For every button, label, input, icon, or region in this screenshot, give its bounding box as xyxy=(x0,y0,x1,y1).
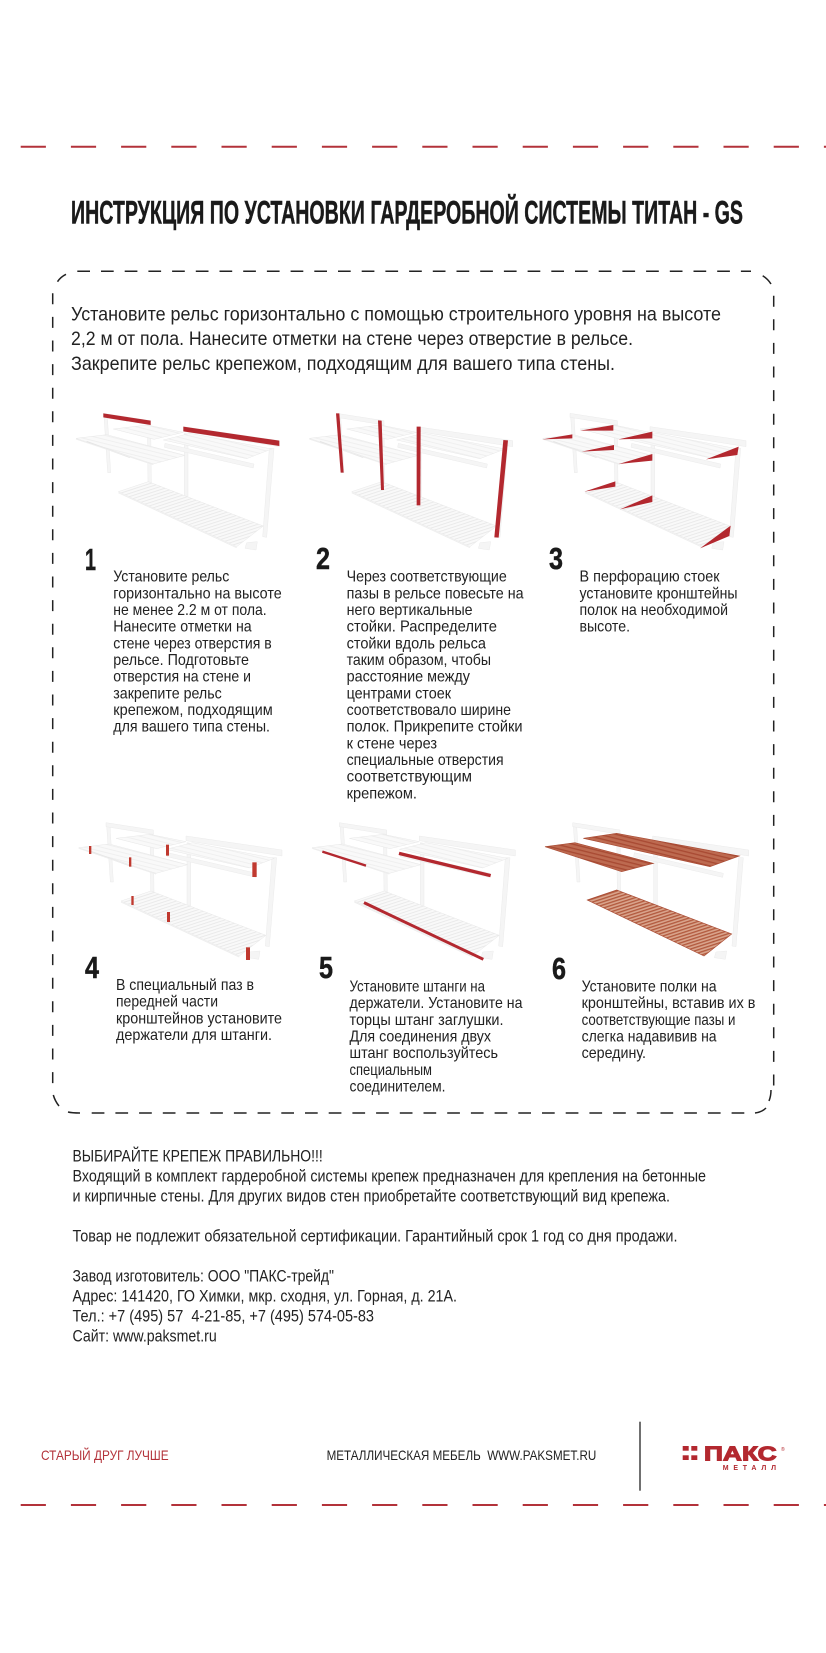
step 6 number: 6 xyxy=(552,951,566,986)
step 6 text: Установите полки на xyxy=(582,978,717,996)
step 2 text: таким образом, чтобы xyxy=(347,652,491,669)
footer website: МЕТАЛЛИЧЕСКАЯ МЕБЕЛЬ WWW.PAKSMET.RU xyxy=(327,1447,596,1463)
step 1 illustration: rails highlighted xyxy=(76,413,279,550)
dashed rounded panel border xyxy=(53,271,774,1113)
step 6 text: кронштейны, вставив их в xyxy=(582,995,755,1012)
step 2 text: к стене через xyxy=(347,735,437,752)
intro text: Установите рельс горизонтально с помощью строительного уровня на высоте xyxy=(71,304,721,326)
notes text block: ВЫБИРАЙТЕ КРЕПЕЖ ПРАВИЛЬНО!!! xyxy=(72,1147,323,1166)
step 5 text: держатели. Установите на xyxy=(350,995,523,1012)
logo: ® xyxy=(781,1446,785,1453)
step 4 panel xyxy=(79,823,282,1044)
step 2 text: стойки. Распределите xyxy=(347,619,497,636)
step 5 illustration: rods highlighted xyxy=(312,823,515,959)
step 2 text: специальные отверстия xyxy=(347,752,504,769)
notes text block: Завод изготовитель: ООО "ПАКС-трейд" xyxy=(72,1268,334,1286)
step 3 text: В перфорацию стоек xyxy=(580,569,720,586)
step 3 panel xyxy=(542,413,746,636)
step 1 text: крепежом, подходящим xyxy=(113,702,273,719)
step 3 text: установите кронштейны xyxy=(580,585,738,602)
intro text: 2,2 м от пола. Нанесите отметки на стене через отверстие в рельсе. xyxy=(71,328,633,350)
step 2 text: центрами стоек xyxy=(347,685,452,702)
step 2 text: пазы в рельсе повесьте на xyxy=(347,585,524,602)
footer slogan: СТАРЫЙ ДРУГ ЛУЧШЕ xyxy=(41,1446,169,1463)
step 2 text: полок. Прикрепите стойки xyxy=(347,719,523,736)
step 5 text: штанг воспользуйтесь xyxy=(350,1045,498,1062)
top dashed red line xyxy=(21,146,826,148)
step 1 text: Нанесите отметки на xyxy=(113,619,252,636)
footer vertical divider xyxy=(639,1422,641,1491)
step 6 panel xyxy=(545,823,755,1062)
step 5 text: специальным xyxy=(350,1062,432,1079)
step 6 text: слегка надавивив на xyxy=(582,1028,717,1046)
step 3 number: 3 xyxy=(549,541,563,576)
step 4 illustration: rod holders highlighted xyxy=(79,823,282,960)
logo xyxy=(683,1443,785,1472)
notes text block: Тел.: +7 (495) 57 4-21-85, +7 (495) 574-05-83 xyxy=(72,1308,374,1326)
step 3 text xyxy=(580,569,738,636)
step 2 text: крепежом. xyxy=(347,785,417,802)
step 5 text xyxy=(350,978,523,1096)
step 5 panel xyxy=(312,823,523,1096)
step 2 text: расстояние между xyxy=(347,669,470,686)
step 1 text: не менее 2.2 м от пола. xyxy=(113,602,267,619)
step 5 text: соединителем. xyxy=(350,1079,446,1096)
step 5 text: Установите штанги на xyxy=(350,978,485,996)
notes text block: Товар не подлежит обязательной сертификации. Гарантийный срок 1 год со дня продажи. xyxy=(72,1228,678,1246)
step 6 illustration: shelves highlighted xyxy=(545,823,749,959)
step 4 text xyxy=(116,977,282,1044)
step 2 text: него вертикальные xyxy=(347,602,473,619)
step 6 text xyxy=(582,978,755,1062)
step 1 text xyxy=(113,569,282,736)
intro text xyxy=(71,304,721,375)
step 3 text: полок на необходимой xyxy=(580,602,728,619)
step 2 text: соответствовало ширине xyxy=(347,702,511,719)
step 5 text: Для соединения двух xyxy=(350,1028,491,1046)
bottom dashed red line xyxy=(21,1504,826,1506)
step 1 text: Установите рельс xyxy=(113,569,229,586)
step 1 text: для вашего типа стены. xyxy=(113,719,270,736)
step 4 text: держатели для штанги. xyxy=(116,1027,272,1044)
step 1 text: стене через отверстия в xyxy=(113,635,272,652)
step 4 text: передней части xyxy=(116,994,218,1011)
step 2 panel xyxy=(309,413,524,802)
step 1 text: отверстия на стене и xyxy=(113,669,251,686)
logo: МЕТАЛЛ xyxy=(723,1465,776,1472)
intro text: Закрепите рельс крепежом, подходящим для вашего типа стены. xyxy=(71,353,615,375)
notes text block: Входящий в комплект гардеробной системы крепеж предназначен для крепления на бетонные xyxy=(72,1168,706,1186)
step 1 text: закрепите рельс xyxy=(113,685,222,702)
step 3 illustration: brackets highlighted xyxy=(542,413,746,550)
step 3 text: высоте. xyxy=(580,619,630,636)
step 2 number: 2 xyxy=(316,541,330,576)
step 6 text: середину. xyxy=(582,1045,646,1062)
step 2 text: Через соответствующие xyxy=(347,569,507,586)
step 5 text: торцы штанг заглушки. xyxy=(350,1012,504,1029)
step 5 number: 5 xyxy=(319,950,333,985)
notes text block: Сайт: www.paksmet.ru xyxy=(72,1328,217,1346)
step 1 text: горизонтально на высоте xyxy=(113,585,282,602)
step 2 text: стойки вдоль рельса xyxy=(347,635,486,652)
step 1 number: 1 xyxy=(85,542,96,577)
step 4 text: кронштейнов установите xyxy=(116,1010,282,1027)
step 1 text: рельсе. Подготовьте xyxy=(113,652,249,669)
notes text block: и кирпичные стены. Для других видов стен приобретайте соответствующий вид крепежа. xyxy=(72,1188,670,1206)
step 4 number: 4 xyxy=(85,950,100,985)
step 2 text: соответствующим xyxy=(347,769,472,786)
step 2 illustration: uprights highlighted xyxy=(309,413,513,550)
step 4 text: В специальный паз в xyxy=(116,977,254,994)
step 2 text xyxy=(347,569,524,802)
logo: ПАКС xyxy=(704,1443,777,1466)
notes text block xyxy=(72,1147,706,1346)
step 1 panel xyxy=(76,413,282,736)
step 6 text: соответствующие пазы и xyxy=(582,1012,735,1029)
notes text block: Адрес: 141420, ГО Химки, мкр. сходня, ул. Горная, д. 21А. xyxy=(72,1288,457,1306)
